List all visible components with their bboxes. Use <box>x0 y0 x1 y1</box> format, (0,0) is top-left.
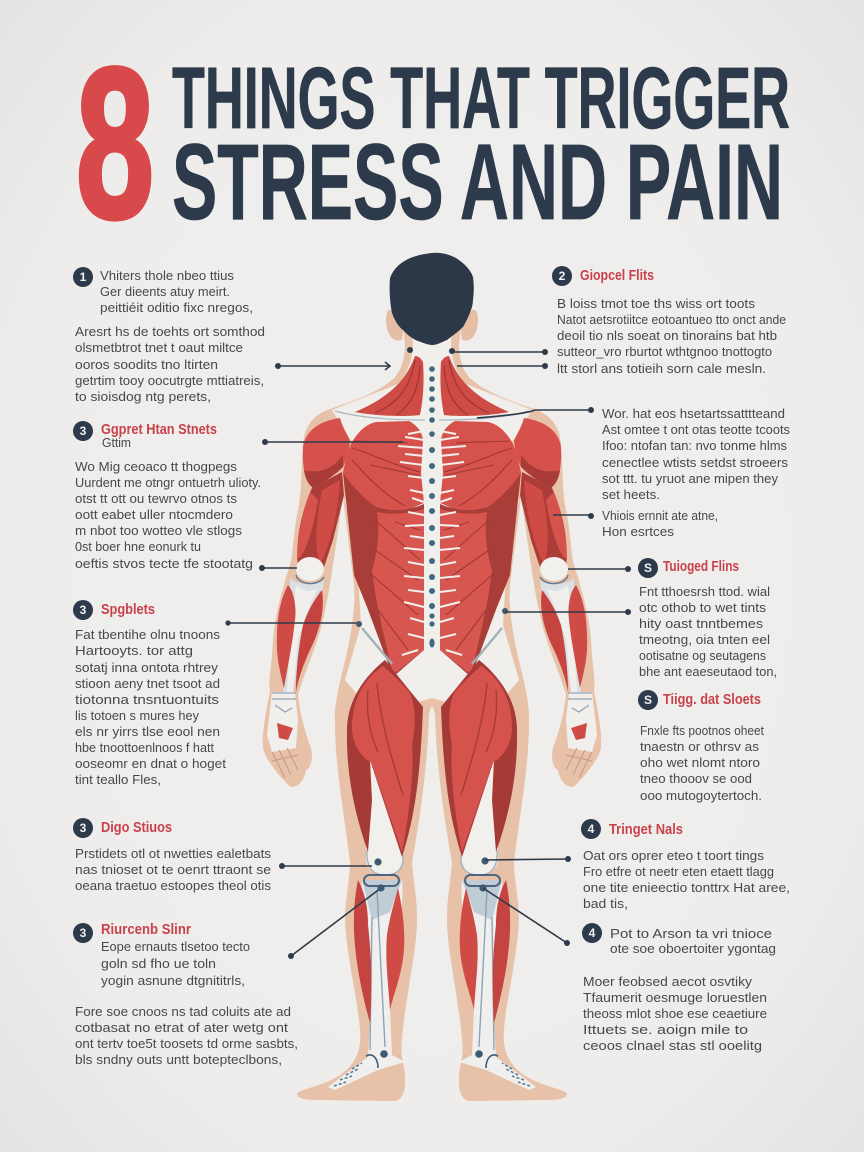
badge <box>73 923 93 943</box>
badge: 2 <box>559 269 566 283</box>
callout text: m nbot too wotteo vle stlogs <box>75 524 242 538</box>
heading: Digo Stiuos <box>101 819 172 836</box>
callout text: otst tt ott ou tewrvo otnos ts <box>75 492 237 506</box>
right half of body (mirror) <box>432 310 601 1101</box>
callout 3: Spgblets <box>73 600 227 787</box>
heading: Ggpret Htan Stnets <box>101 421 217 438</box>
callout text: Gttim <box>102 436 131 450</box>
callout text: lis totoen s mures hey <box>75 709 200 723</box>
callout text: Uurdent me otngr ontuetrh ulioty. <box>75 476 261 490</box>
forearm outer muscle <box>277 585 296 688</box>
title numeral 8: 8 <box>76 24 154 263</box>
callout 1 text: ooros soodits tno ltirten <box>75 358 218 372</box>
callout text: Oat ors oprer eteo t toort tings <box>583 849 764 863</box>
callout: shoulder description: Hon esrtces <box>602 525 674 539</box>
callout text <box>639 585 777 679</box>
callout text: theoss mlot shoe ese ceaetiure <box>583 1007 767 1021</box>
callout 4: lower right <box>582 923 776 1053</box>
callout text: ltt storl ans totieih sorn cale mesln. <box>557 362 766 376</box>
leader: knee right <box>481 856 571 865</box>
leader: neck right lower <box>457 363 548 369</box>
callout text: Fnt tthoesrsh ttod. wial <box>639 585 770 599</box>
badge: 3 <box>80 821 87 835</box>
leader: knee left <box>279 858 382 869</box>
callout text: Eope ernauts tlsetoo tecto <box>101 940 250 954</box>
callout 1 text: Aresrt hs de toehts ort somthod <box>75 325 265 339</box>
badge: 3 <box>80 603 87 617</box>
callout: shoulder description: Wor. hat eos hsetartssatttteand <box>602 407 785 421</box>
callout text: bhe ant eaeseutaod ton, <box>639 665 777 679</box>
callout 3: Ggpret Htan Stnets <box>73 421 261 571</box>
callout text: els nr yirrs tlse eool nen <box>75 725 220 739</box>
callout text <box>75 628 227 787</box>
callout 3: Digo Stiuos <box>73 818 271 893</box>
callout 1 text: peittiéit oditio fixc nregos, <box>100 301 253 315</box>
body figure: back view muscular anatomy <box>263 253 601 1101</box>
callout text: B loiss tmot toe ths wiss ort toots <box>557 297 755 311</box>
foot bones <box>334 1063 362 1086</box>
calf inner muscle <box>386 888 404 1010</box>
badge <box>582 923 602 943</box>
callout text: cotbasat no etrat of ater wetg ont <box>75 1021 289 1035</box>
badge: 4 <box>589 926 596 940</box>
callout 4: Tringet Nals <box>581 819 790 911</box>
callout text: yogin asnune dtgnititrls, <box>101 974 245 988</box>
badge <box>73 421 93 441</box>
white torso, spine and hip area <box>332 335 432 702</box>
callout 1 text <box>75 269 265 404</box>
heading: Tiigg. dat Sloets <box>663 691 761 708</box>
skin silhouette <box>263 325 432 1101</box>
badge: S <box>644 693 652 707</box>
badge 1: 1 <box>80 270 87 284</box>
neck trapezius muscle <box>355 356 424 416</box>
callout: shoulder description: Vhiois ernnit ate atne, <box>602 509 718 523</box>
ankle dots <box>380 1050 483 1058</box>
callout 1 <box>73 267 265 404</box>
callout 2: Giopcel Flits <box>552 266 786 376</box>
callout text <box>75 847 271 893</box>
leader: elbow left <box>259 565 297 571</box>
callout text: Fro etfre ot neetr eten etaett tlagg <box>583 865 774 879</box>
heading: Riurcenb Slinr <box>101 921 191 938</box>
badge 1 <box>73 267 93 287</box>
callout text <box>583 849 790 911</box>
callout text: sutteor_vro rburtot wthtgnoo tnottogto <box>557 345 772 359</box>
callout text: ceoos clnael stas stl ooelitg <box>583 1039 762 1053</box>
callout text: bls sndny outs untt botepteclbons, <box>75 1053 282 1067</box>
callout: shoulder description: sot ttt. tu yruot ane mipen they <box>602 472 779 486</box>
badge <box>73 818 93 838</box>
callout text: tnaestn or othrsv as <box>640 740 759 754</box>
wrist and hand <box>267 692 298 752</box>
callout 1 text: Vhiters thole nbeo ttius <box>100 269 234 283</box>
elbow arc <box>296 575 324 584</box>
leader: shin left <box>288 884 385 959</box>
leader: hip left <box>225 620 362 627</box>
thigh white wedge and knee backing <box>366 755 403 875</box>
leader: arm right <box>553 513 594 519</box>
upper back muscle <box>343 421 424 511</box>
callout text: tiotonna tnsntuontuits <box>75 693 219 707</box>
leader: neck left <box>275 362 390 370</box>
callout text: Fnxle fts pootnos oheet <box>640 724 764 738</box>
latissimus lower back muscle <box>343 473 424 677</box>
heading: Giopcel Flits <box>580 267 654 284</box>
callout text: tint teallo Fles, <box>75 773 161 787</box>
callout text <box>640 724 764 803</box>
callout text: oott eabet uller ntocmdero <box>75 508 233 522</box>
hip tendon lines <box>362 628 502 664</box>
callout text: ont tertv toe5t toosets td orme sasbts, <box>75 1037 298 1051</box>
callout text: hity oast tnntbemes <box>639 617 763 631</box>
badge <box>552 266 572 286</box>
callout text: 0st boer hne eonurk tu <box>75 540 201 554</box>
callout 1 text: Ger dieents atuy meirt. <box>100 285 230 299</box>
badge: S <box>644 561 652 575</box>
callout text: tneo thooov se ood <box>640 772 752 786</box>
thigh muscle light <box>352 666 415 852</box>
callout text: Prstidets otl ot nwetties ealetbats <box>75 847 271 861</box>
callout: shoulder description: Ifoo: ntofan tan: nvo tonme hlms <box>602 439 787 453</box>
callout text: ooo mutogoytertoch. <box>640 789 762 803</box>
leader: neck right upper <box>407 347 548 355</box>
callout text <box>75 940 298 1067</box>
callout: shoulder description: set heets. <box>602 488 660 502</box>
callout 3: Riurcenb Slinr <box>73 921 298 1067</box>
callout S: Tiigg. dat Sloets <box>638 690 764 803</box>
collar band line <box>335 411 425 420</box>
left half of body <box>263 310 432 1101</box>
callout text: tmeotng, oia tnten eel <box>639 633 770 647</box>
callout text: hbe tnoottoenlnoos f hatt <box>75 741 215 755</box>
callout text: ootisatne og seutagens <box>639 649 766 663</box>
lower leg bone <box>328 880 405 1090</box>
badge <box>73 600 93 620</box>
callout text: Pot to Arson ta vri tnioce <box>610 927 772 941</box>
callout 1 text: getrtim tooy oocutrgte mttiatreis, <box>75 374 264 388</box>
callout text: bad tis, <box>583 897 628 911</box>
callout text: ote soe oboertoiter ygontag <box>610 942 776 956</box>
callout text <box>557 297 786 376</box>
callout text: Wo Mig ceoaco tt thogpegs <box>75 460 237 474</box>
calf outer muscle <box>354 880 371 1023</box>
callout text: Natot aetsrotiitce eotoantueo tto onct ande <box>557 313 786 327</box>
callout text: goln sd fho ue toln <box>101 957 216 971</box>
callout text <box>583 927 776 1053</box>
badge: 3 <box>80 424 87 438</box>
callout 1 text: to sioisdog ntg perets, <box>75 390 211 404</box>
thigh muscle dark base <box>347 660 423 857</box>
elbow <box>296 557 324 581</box>
badge <box>581 819 601 839</box>
callout text: otc othob to wet tints <box>639 601 766 615</box>
callout text: ooseomr en dnat o hoget <box>75 757 227 771</box>
callout text: nas tnioset ot te oenrt ttraont se <box>75 863 271 877</box>
heading: Spgblets <box>101 601 155 618</box>
callout: shoulder description: Ast omtee t ont otas teotte tcoots <box>602 423 790 437</box>
callout text: deoil tio nls soeat on tinorains bat htb <box>557 329 777 343</box>
callout S: Tuioged Flins <box>638 558 777 679</box>
callout text: oho wet nlomt ntoro <box>640 756 760 770</box>
callout text: oeana traetuo estoopes theol otis <box>75 879 271 893</box>
callout 1 text: olsmetbtrot tnet t oaut miltce <box>75 341 243 355</box>
forearm inner muscle <box>296 590 323 692</box>
leader: back left <box>262 439 403 445</box>
callout text: Tfaumerit oesmuge loruestlen <box>583 991 767 1005</box>
callout text: sotatj inna ontota rhtrey <box>75 661 219 675</box>
spine dots <box>429 366 435 648</box>
leader: elbow right <box>568 566 631 572</box>
deltoid muscle <box>303 418 350 488</box>
leader: shoulder right <box>477 407 594 418</box>
badge: 4 <box>588 822 595 836</box>
callout text <box>75 436 261 571</box>
upper arm muscle <box>297 472 344 572</box>
callout: shoulder description: cenectlee wtists setdst stroeers <box>602 456 788 470</box>
callout text: Hartooyts. tor attg <box>75 644 193 658</box>
callout text: oeftis stvos tecte tfe stootatg <box>75 557 253 571</box>
heading: Tuioged Flins <box>663 558 739 575</box>
leader: hip right <box>502 608 631 615</box>
callout text: Ittuets se. aoign mile to <box>583 1023 748 1037</box>
callout: shoulder description <box>602 407 790 539</box>
knee outline <box>367 850 403 875</box>
heading: Tringet Nals <box>609 821 683 838</box>
leader lines <box>225 347 631 1058</box>
callout text: Fore soe cnoos ns tad coluits ate ad <box>75 1005 291 1019</box>
title <box>76 24 790 263</box>
ear <box>386 310 404 340</box>
leader: shin right <box>479 884 570 946</box>
hair <box>390 253 474 345</box>
callout text: Fat tbentihe olnu tnoons <box>75 628 220 642</box>
callout text: Moer feobsed aecot osvtiky <box>583 975 753 989</box>
forearm bone <box>283 578 324 692</box>
callout text: stioon aeny tnet tsoot ad <box>75 677 220 691</box>
knee joint ring <box>364 875 399 886</box>
badge: 3 <box>80 926 87 940</box>
callout text: one tite enieectio tonttrx Hat aree, <box>583 881 790 895</box>
